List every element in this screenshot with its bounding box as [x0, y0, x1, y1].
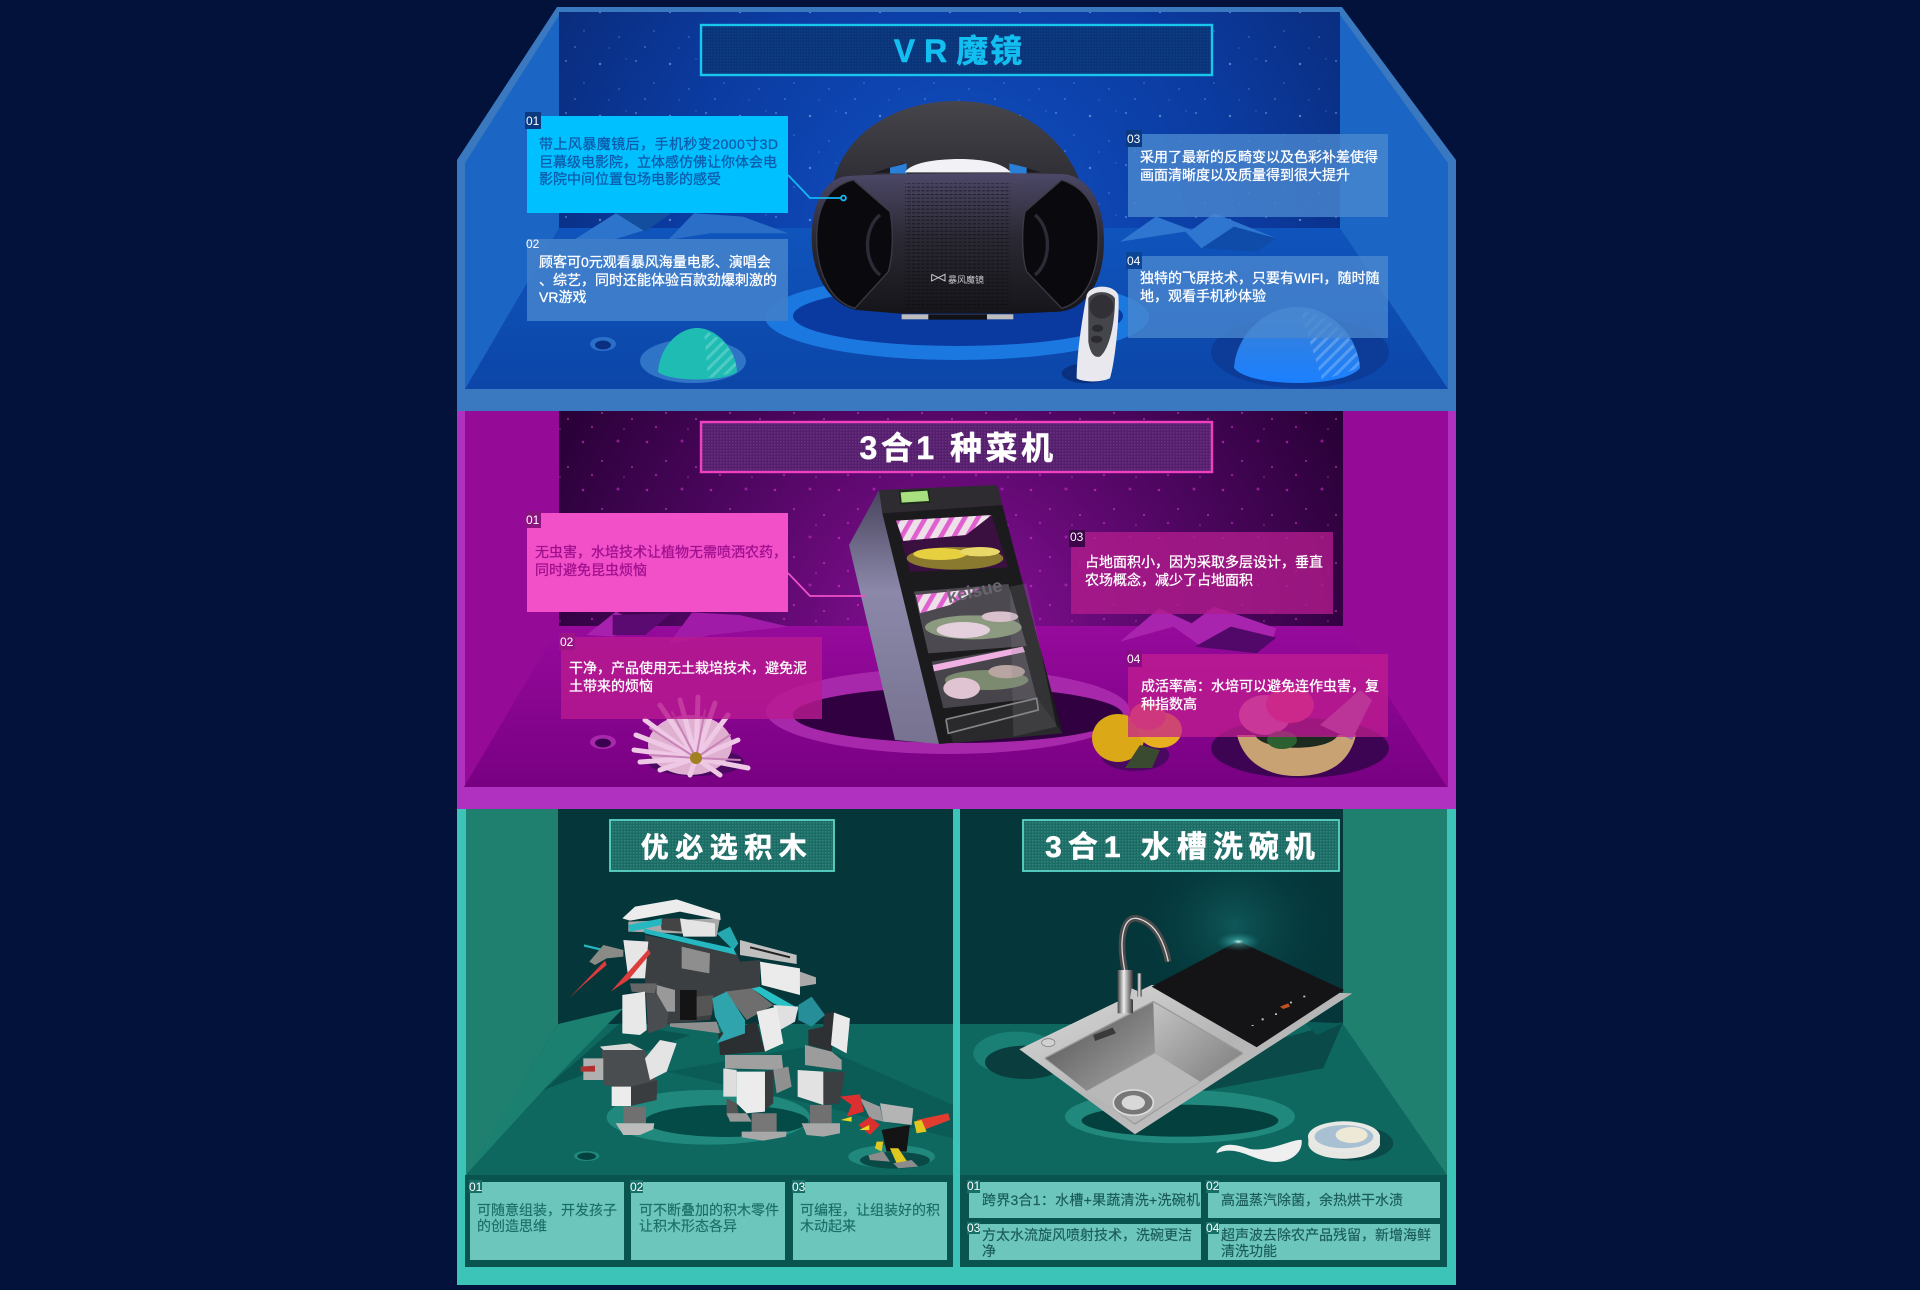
callout 02: 02: [560, 635, 574, 649]
callout 04: [1126, 650, 1388, 737]
feature 03: 方太水流旋风喷射技术，洗碗更洁: [982, 1227, 1192, 1243]
panel: VR magic mirror: [457, 7, 1456, 411]
text band: [465, 1175, 953, 1267]
heading: 3合1 水槽洗碗机: 3合1 水槽洗碗机: [1045, 831, 1321, 864]
floor ring: [765, 274, 1149, 360]
callout 02: [526, 237, 788, 321]
feature 03: 可编程，让组装好的积: [800, 1202, 940, 1218]
feature 04: 超声波去除农产品残留，新增海鲜: [1221, 1227, 1431, 1243]
callout 03: 占地面积小，因为采取多层设计，垂直: [1085, 554, 1323, 570]
panel: 3-in-1 sink dishwasher: [960, 809, 1447, 1267]
pink chrysanthemum: [634, 697, 748, 776]
floor ring: [766, 668, 1130, 754]
feature 03: 03: [967, 1221, 981, 1235]
callout 03: 农场概念，减少了占地面积: [1085, 572, 1253, 588]
callout 01: 01: [526, 513, 540, 527]
panel: 3-in-1 vegetable planter: [457, 411, 1456, 809]
small floor hole: [590, 735, 616, 749]
feature 04: [1206, 1221, 1440, 1260]
callout 02: 干净，产品使用无土栽培技术，避免泥: [569, 660, 807, 676]
callout 03: 画面清晰度以及质量得到很大提升: [1140, 167, 1350, 183]
callout 03: 采用了最新的反畸变以及色彩补差使得: [1140, 149, 1378, 165]
feature 01: 01: [967, 1179, 981, 1193]
large robot: [569, 899, 850, 1141]
feature 01: 跨界3合1：水槽+果蔬清洗+洗碗机: [982, 1192, 1200, 1208]
small floor hole: [590, 337, 616, 351]
feature 02: 让积木形态各异: [639, 1218, 737, 1234]
planter cabinet: [849, 485, 1063, 744]
controller: [1062, 287, 1119, 383]
headset logo: 暴风魔镜: [948, 274, 984, 285]
panel: teal frame background: [457, 809, 1456, 1285]
feature 03: 净: [982, 1243, 996, 1259]
callout 01: 同时避免昆虫烦恼: [535, 562, 647, 578]
callout 04: [1126, 252, 1388, 338]
floor facets: [466, 1008, 953, 1175]
callout 01: 01: [526, 114, 540, 128]
callout 01: 巨幕级电影院，立体感仿佛让你体会电: [539, 154, 777, 170]
callout 02: [559, 633, 822, 719]
decorative rocks: [574, 213, 1276, 252]
callout 03: 03: [1070, 530, 1084, 544]
feature 03: [967, 1221, 1201, 1260]
callout 01: [525, 511, 788, 612]
feature 04: 04: [1206, 1221, 1220, 1235]
feature 01: 01: [469, 1180, 483, 1194]
sink shadows and rings: [973, 1022, 1393, 1161]
sink dishwasher: [1019, 918, 1352, 1134]
callout 03: [1069, 530, 1333, 614]
callout 01: 无虫害，水培技术让植物无需喷洒农药，: [535, 544, 787, 560]
panel: UBTECH building blocks: [465, 809, 953, 1267]
feature 03: 木动起来: [800, 1218, 856, 1234]
callout 01: 带上风暴魔镜后，手机秒变2000寸3D: [539, 136, 778, 152]
heading: 3合1 水槽洗碗机: [1023, 820, 1339, 871]
feature 02: 02: [630, 1180, 644, 1194]
connector line to headset: [788, 175, 846, 200]
VR headset: [812, 101, 1104, 320]
heading: VR魔镜: [701, 25, 1212, 75]
heading: 3合1 种菜机: [701, 422, 1212, 472]
feature 01: [469, 1180, 624, 1260]
callout 04: 成活率高：水培可以避免连作虫害，复: [1141, 678, 1379, 694]
decorative rocks: [587, 607, 1276, 653]
connector line to cabinet: [788, 573, 866, 596]
feature 01: 的创造思维: [477, 1218, 547, 1234]
callout 04: 独特的飞屏技术，只要有WIFI，随时随: [1140, 270, 1380, 286]
floor ring: [574, 1090, 935, 1169]
blue dome: [1211, 307, 1389, 388]
callout 04: 04: [1127, 652, 1141, 666]
callout 04: 地，观看手机秒体验: [1140, 288, 1266, 304]
heading: 3合1 种菜机: 3合1 种菜机: [860, 430, 1056, 466]
yellow flowers: [1092, 702, 1182, 771]
callout 04: 种指数高: [1141, 696, 1197, 712]
feature 03: 03: [792, 1180, 806, 1194]
spoon and dish: [1217, 1121, 1380, 1162]
callout 02: 、综艺，同时还能体验百款劲爆刺激的: [539, 272, 777, 288]
feature 02: 高温蒸汽除菌，余热烘干水渍: [1221, 1192, 1403, 1208]
heading: VR魔镜: VR魔镜: [894, 33, 1024, 69]
callout 02: 02: [526, 237, 540, 251]
callout 03: [1126, 130, 1388, 217]
feature 01: [967, 1179, 1201, 1218]
callout 02: VR游戏: [539, 289, 586, 305]
feature 02: 02: [1206, 1179, 1220, 1193]
small robot: [840, 1094, 950, 1168]
heading: 优必选积木: 优必选积木: [641, 832, 813, 863]
callout 03: 03: [1127, 132, 1141, 146]
vegetable basket: [1211, 687, 1389, 778]
heading: 优必选积木: [610, 820, 834, 871]
feature 03: [792, 1180, 947, 1260]
text band: [960, 1175, 1447, 1267]
callout 02: 土带来的烦恼: [569, 678, 653, 694]
callout 01: 影院中间位置包场电影的感受: [539, 171, 721, 187]
feature 02: 可不断叠加的积木零件: [639, 1202, 779, 1218]
teal dome: [640, 328, 746, 383]
feature 01: 可随意组装，开发孩子: [477, 1202, 617, 1218]
feature 02: [630, 1180, 785, 1260]
callout 01: [525, 112, 788, 213]
callout 02: 顾客可0元观看暴风海量电影、演唱会: [539, 254, 771, 270]
feature 04: 清洗功能: [1221, 1243, 1277, 1259]
planter logo: keisue: [945, 575, 1004, 607]
callout 04: 04: [1127, 254, 1141, 268]
feature 02: [1206, 1179, 1440, 1218]
